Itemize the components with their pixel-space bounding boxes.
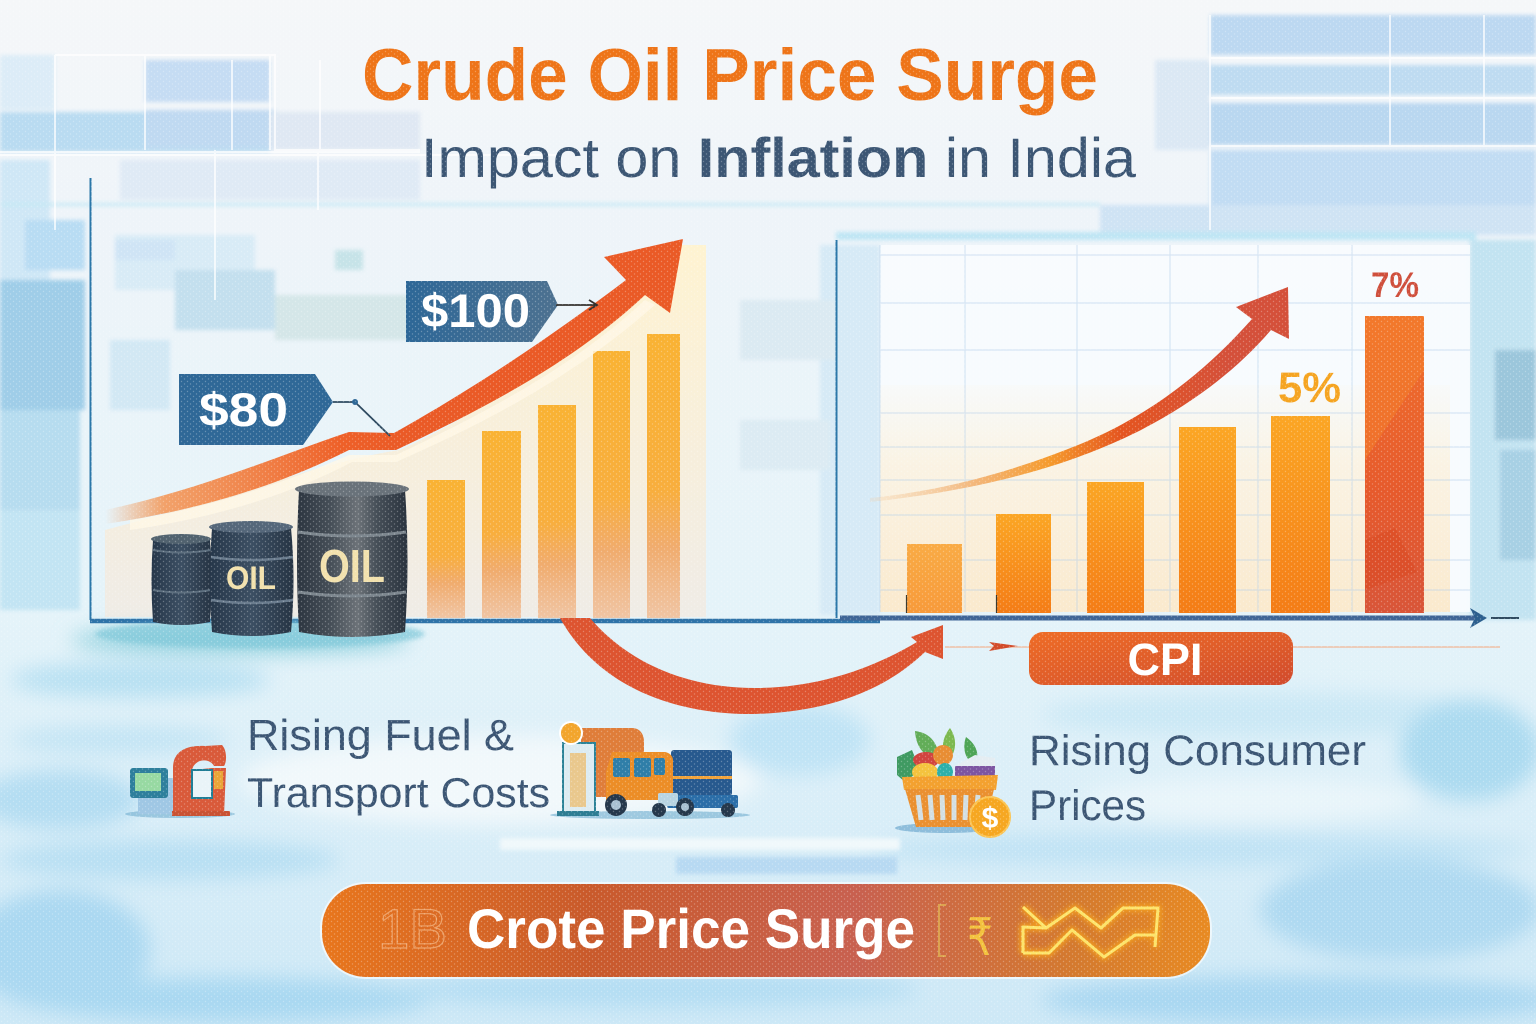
left bar chart (427, 334, 680, 618)
CPI pill: CPI (1128, 634, 1202, 685)
left price arrow (105, 239, 683, 524)
icon: glowing price line (1023, 907, 1158, 957)
price tag $80 (179, 374, 390, 445)
price tag $100: $100 (421, 284, 530, 337)
banner text: Crote Price Surge (467, 897, 915, 960)
right chart panel (880, 245, 1470, 612)
small arrow to CPI (989, 642, 1018, 651)
outlined label 1B: 1B (378, 897, 447, 960)
curved arrow from oil to CPI (560, 618, 943, 714)
icon: fuel station and truck (550, 722, 750, 819)
rupee glyph: ₹ (967, 908, 993, 968)
left chart warm glow (105, 245, 706, 617)
barrel ground shadow (95, 620, 425, 648)
subtitle: Impact on Inflation in India (421, 126, 1137, 189)
oil barrels (151, 482, 409, 637)
bottom banner (320, 882, 1212, 979)
medium barrel (209, 521, 294, 636)
large barrel: OIL (319, 540, 385, 592)
icon: grocery basket with coin: $ (982, 802, 999, 835)
medium barrel: OIL (226, 560, 276, 596)
text: rising fuel and transport costs (247, 711, 550, 816)
thin link line through CPI (945, 646, 1500, 648)
icon: fuel pump (125, 745, 235, 818)
right bar chart (906, 316, 1424, 613)
large barrel (295, 482, 409, 637)
price tag $80: $80 (199, 383, 288, 436)
CPI pill (1029, 632, 1293, 685)
text: rising fuel and transport costs: Rising Fuel & (247, 711, 514, 760)
right CPI arrow (870, 287, 1289, 502)
value label 5%: 5% (1278, 364, 1341, 412)
icon: grocery basket with coin (895, 728, 1010, 837)
text: rising consumer prices (1029, 727, 1366, 830)
title: Crude Oil Price Surge (362, 35, 1098, 116)
left price arrow underside highlight (130, 300, 655, 530)
text: rising fuel and transport costs: Transport Costs (247, 769, 550, 816)
text: rising consumer prices: Rising Consumer (1029, 727, 1366, 775)
bracket (939, 905, 946, 956)
price tag $100 (406, 281, 597, 342)
text: rising consumer prices: Prices (1029, 782, 1146, 830)
value label 7%: 7% (1371, 266, 1419, 305)
axes (90, 178, 1519, 628)
small barrel (151, 534, 212, 625)
